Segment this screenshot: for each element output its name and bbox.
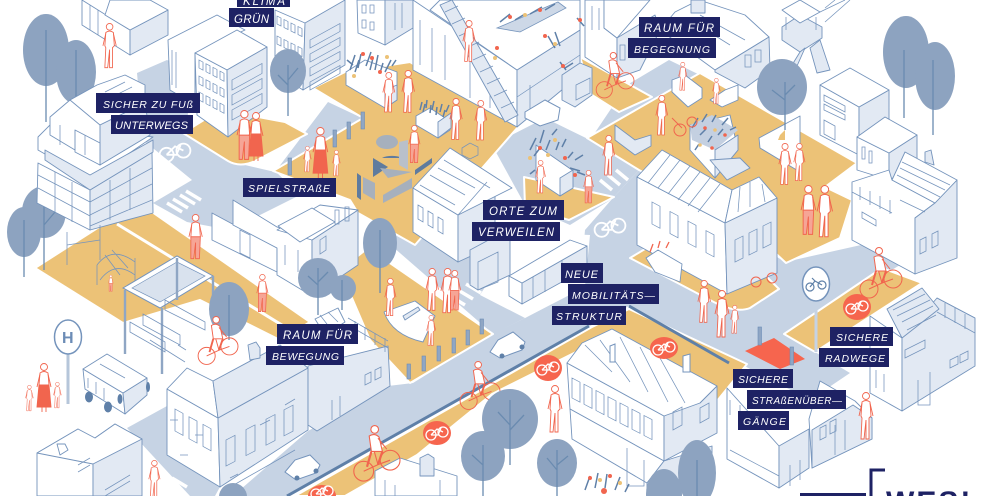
- bench objects: right plaza: [615, 75, 800, 172]
- callout: Raum fuer Bewegung: RAUM FÜR: [283, 330, 352, 342]
- callout: Raum fuer Bewegung: BEWEGUNG: [272, 351, 339, 363]
- callout: Neue Mobilitaetsstruktur: [552, 263, 659, 325]
- callout: Orte zum Verweilen: [472, 200, 564, 241]
- building: slab behind green label: [275, 0, 413, 90]
- planting on building facade: [493, 4, 584, 70]
- callout: Klima Gruen: GRÜN: [234, 14, 270, 26]
- callout: Sichere Strassenuebergaenge: [733, 369, 846, 430]
- white bicycle road symbols: [160, 144, 625, 237]
- callout: Sicher zu Fuss unterwegs: SICHER ZU FUß: [103, 99, 193, 111]
- callout: Raum fuer Begegnung: BEGEGNUNG: [634, 44, 710, 56]
- bowl-shaped play object: [384, 301, 435, 342]
- playful shapes on play street: [357, 135, 432, 203]
- building: right cube: [820, 68, 917, 180]
- cycle route sign: [802, 267, 830, 352]
- callout: Sichere Radwege: SICHERE: [836, 332, 889, 344]
- building: main mixed-use block with roof garden: [413, 0, 592, 127]
- callout: Spielstrasse: [243, 178, 336, 197]
- building: next to Raum fuer Bewegung: [308, 308, 390, 431]
- bus stop sign H: [54, 320, 82, 404]
- callout: Raum fuer Begegnung: [628, 17, 720, 58]
- callout: Sicher zu Fuss unterwegs: UNTERWEGS: [115, 120, 189, 132]
- callout: Orte zum Verweilen: VERWEILEN: [478, 227, 555, 239]
- bike shelter frame: [123, 256, 213, 374]
- large planter: right plaza: [690, 114, 750, 180]
- trees in foreground: [219, 49, 807, 496]
- callout: Sichere Strassenuebergaenge: STRAßENÜBER—: [752, 395, 843, 407]
- callout: Sichere Strassenuebergaenge: GÄNGE: [743, 416, 787, 428]
- streets: road network: [127, 60, 905, 496]
- building: tower block: [168, 15, 267, 137]
- logo: partially cropped mark and wordmark: [800, 470, 972, 496]
- callout: Neue Mobilitaetsstruktur: NEUE: [565, 269, 599, 281]
- bus stop sign H: H: [62, 330, 74, 347]
- callout: Sichere Radwege: [819, 327, 893, 367]
- building: bottom centre house: [167, 342, 308, 490]
- bus: [83, 354, 150, 414]
- building: right gabled house: [870, 288, 975, 411]
- callout: Klima Gruen: [229, 0, 290, 27]
- planter with flowers: yellow patch centre: [528, 129, 585, 196]
- callout: Sichere Strassenuebergaenge: SICHERE: [738, 374, 789, 386]
- bollards: [288, 112, 794, 379]
- building: top left box: [82, 0, 168, 55]
- trees behind buildings: [7, 14, 955, 277]
- building: bottom right duo: [727, 381, 872, 488]
- building: top centre houses: [585, 0, 770, 88]
- planter with flowers: left plaza: [346, 52, 397, 108]
- building: long house with chimneys: [567, 329, 717, 496]
- building: bottom left: [37, 424, 142, 496]
- cars: [285, 332, 525, 480]
- building: bottom small: [375, 454, 457, 496]
- building: stacked terraces left: [37, 75, 153, 230]
- callout: Raum fuer Bewegung: [266, 324, 358, 365]
- building: gabled house centre: [413, 143, 512, 262]
- yellow pedestrian and play areas: [35, 57, 922, 496]
- callout: Neue Mobilitaetsstruktur: MOBILITÄTS—: [572, 290, 656, 302]
- playground climbing frame: [67, 225, 135, 285]
- callout: Sicher zu Fuss unterwegs: [96, 93, 200, 134]
- building: large central house with mansard roof: [637, 150, 777, 294]
- planter: centre plaza: [416, 100, 451, 138]
- callout: Spielstrasse: SPIELSTRAßE: [248, 183, 331, 195]
- callout: Orte zum Verweilen: ORTE ZUM: [489, 206, 557, 218]
- crosswalk markings: [165, 170, 628, 491]
- callout: Neue Mobilitaetsstruktur: STRUKTUR: [556, 311, 622, 323]
- tree by bike shelter: [209, 282, 249, 340]
- buildings: boxes near verweilen label: [470, 235, 587, 304]
- cycle lane red markers: [308, 294, 871, 496]
- planter: lower yellow corner: [646, 241, 682, 282]
- building: gabled house right: [852, 150, 957, 274]
- building: under Spielstrasse label: [212, 200, 358, 296]
- cycle lane stripes: [287, 306, 729, 496]
- red pedestrian crossing: [745, 338, 805, 369]
- callout: Sichere Radwege: RADWEGE: [825, 353, 886, 365]
- callout: Raum fuer Begegnung: RAUM FÜR: [644, 23, 714, 35]
- crane tower: [782, 0, 850, 73]
- flower bed bottom: [585, 473, 629, 494]
